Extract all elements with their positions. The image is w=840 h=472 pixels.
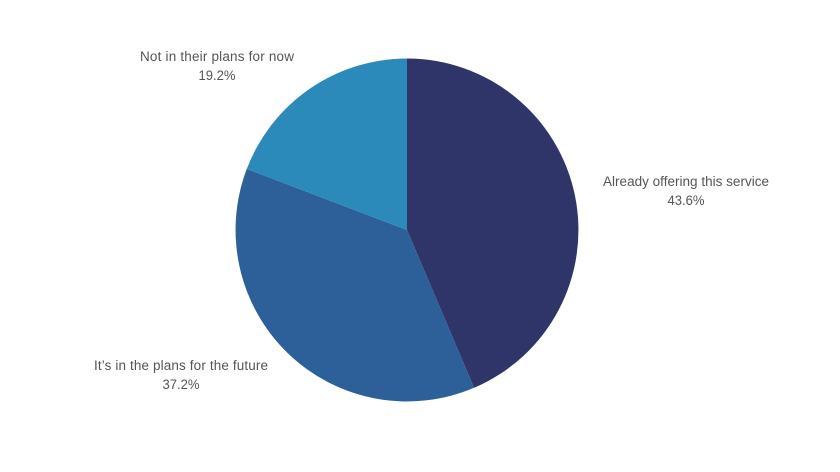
label: not in their plans for now: 19.2% xyxy=(198,68,236,83)
label: not in their plans for now: Not in their plans for now xyxy=(140,49,294,64)
label: in the plans for the future xyxy=(94,358,268,392)
label: not in their plans for now xyxy=(140,49,294,83)
label: in the plans for the future: It’s in the plans for the future xyxy=(94,358,268,373)
label: in the plans for the future: 37.2% xyxy=(162,377,200,392)
slice: in the plans for the future 37.2% xyxy=(236,169,474,401)
slice: not in their plans for now 19.2% xyxy=(247,58,407,230)
label: already offering this service: Already offering this service xyxy=(603,174,769,189)
label: already offering this service xyxy=(603,174,769,208)
label: already offering this service: 43.6% xyxy=(668,193,704,208)
slice: already offering this service 43.6% xyxy=(407,58,578,388)
